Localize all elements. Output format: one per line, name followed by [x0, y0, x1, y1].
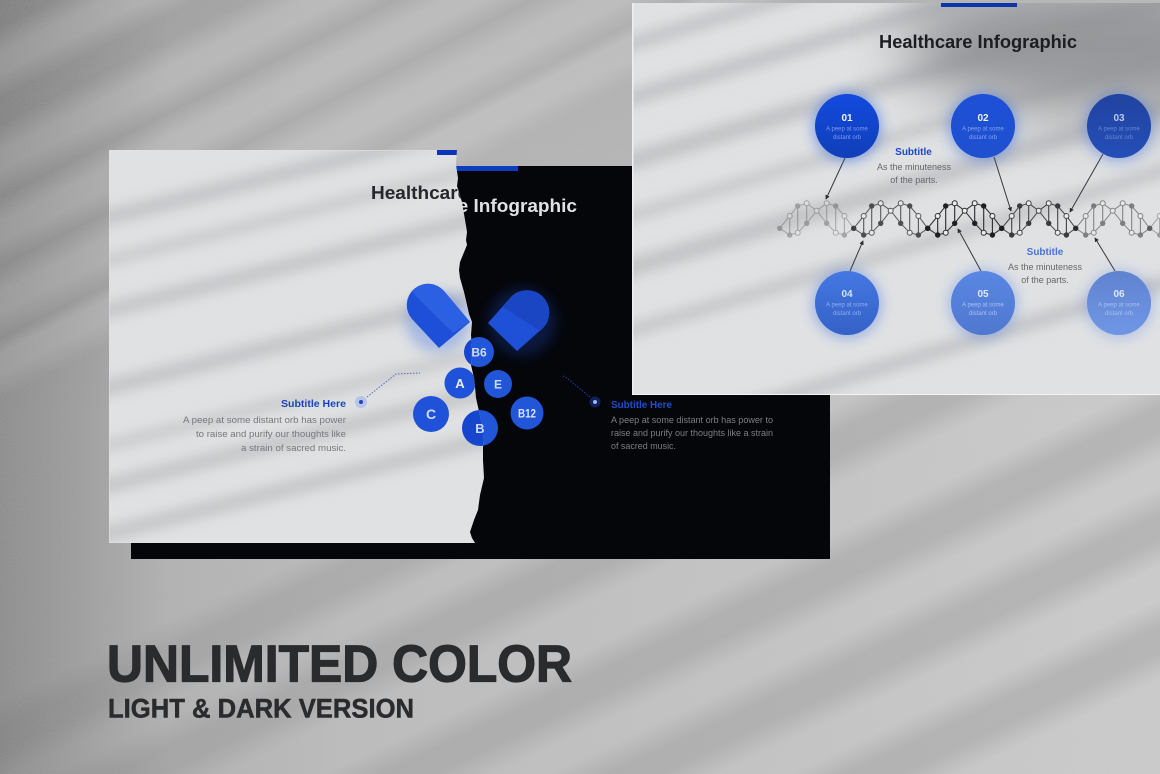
vitamin circle: B6 light part: [464, 339, 472, 365]
circle 06: 06: [1113, 289, 1125, 300]
text block: subtitle two: [1008, 247, 1083, 285]
vitamin circle: B6: B6: [471, 346, 487, 360]
text block: light subtitle: a strain of sacred music.: [241, 443, 346, 453]
text block: dark subtitle: of sacred music.: [611, 441, 676, 451]
dotted leader left: [367, 373, 420, 397]
vitamin circle: B: [462, 410, 498, 446]
dark slide title: Healthcare Infographic: [371, 196, 577, 216]
light slide title: Healthcare Infographic: [371, 183, 577, 203]
text block: subtitle two: of the parts.: [1021, 275, 1069, 285]
circle 02: distant orb: [969, 135, 998, 141]
vitamin circle: B6: [464, 337, 494, 367]
circle 03: A peep at some: [1098, 126, 1141, 132]
accent bar: [941, 3, 1017, 7]
circle 01: A peep at some: [826, 126, 869, 132]
circle 03: distant orb: [1105, 135, 1134, 141]
vitamin circle: B: B: [475, 421, 485, 436]
panel: dark slide: [131, 166, 830, 559]
headline: UNLIMITED COLOR: [107, 636, 572, 694]
text block: dark subtitle: Subtitle Here: [611, 400, 672, 411]
circle 04: A peep at some: [826, 302, 869, 308]
text block: subtitle two: As the minuteness: [1008, 262, 1083, 272]
text block: subtitle one: As the minuteness: [877, 162, 952, 172]
circle 05: A peep at some: [962, 302, 1005, 308]
text block: light subtitle: to raise and purify our thoughts like: [196, 429, 346, 439]
marker left: [355, 396, 367, 408]
vitamin circle: C: [413, 396, 449, 432]
subheadline: LIGHT & DARK VERSION: [108, 694, 414, 724]
vitamin circle: C: C: [426, 406, 436, 422]
circle 05: 05: [977, 289, 989, 300]
circle 04: [812, 269, 882, 339]
vitamin circle: A: [444, 368, 476, 398]
icon: left half of capsule: [407, 284, 470, 348]
text block: subtitle one: Subtitle: [895, 147, 932, 158]
circle 01: [812, 92, 882, 162]
circle 03: [1084, 92, 1154, 162]
text block: light subtitle: A peep at some distant orb has power: [183, 415, 346, 425]
circle 06: distant orb: [1105, 311, 1134, 317]
text block: subtitle one: [877, 147, 952, 185]
text block: light subtitle: Subtitle Here: [281, 399, 346, 410]
circle 05: [948, 269, 1018, 339]
text block: subtitle one: of the parts.: [890, 175, 938, 185]
vitamin circle: E: E: [494, 378, 502, 392]
marker right: [590, 396, 600, 408]
text block: subtitle two: Subtitle: [1027, 247, 1064, 258]
vitamin circle: E: [484, 370, 512, 398]
shadow top right: [900, 0, 1160, 115]
circle 02: A peep at some: [962, 126, 1005, 132]
circle 01: distant orb: [833, 135, 862, 141]
dark slide accent bar: [456, 166, 518, 171]
dotted leader right: [563, 376, 590, 397]
light slide accent bar: [437, 150, 457, 155]
connector arrows: [826, 154, 1115, 271]
vitamin circle: B12: B12: [518, 406, 536, 420]
circle 03: 03: [1113, 113, 1125, 124]
circle 05: distant orb: [969, 311, 998, 317]
text block: light subtitle: [183, 399, 346, 453]
circle 04: distant orb: [833, 311, 862, 317]
text block: dark subtitle: raise and purify our thoughts like a strain: [611, 428, 773, 438]
panel: light slide torn: [109, 150, 484, 543]
dark slide pill glow: [488, 288, 556, 356]
vitamin circle: B12: [510, 396, 544, 430]
vitamin circle: A: A: [455, 376, 465, 391]
circle 01: 01: [841, 113, 853, 124]
text block: dark subtitle: A peep at some distant orb has power to: [611, 415, 773, 425]
DNA helix: [777, 201, 1160, 238]
light slide pill glow: [406, 292, 470, 352]
vitamin circle: B light part: B: [475, 421, 485, 436]
text block: dark subtitle: [611, 400, 773, 451]
circle 04: 04: [841, 289, 853, 300]
circle 02: 02: [977, 113, 989, 124]
circle 02: [948, 92, 1018, 162]
panel: light slide with DNA: [632, 3, 1160, 395]
vitamin circle: B light part: [462, 410, 484, 446]
slide title: Healthcare Infographic: [879, 32, 1077, 52]
circle 06: [1084, 269, 1154, 339]
circle 06: A peep at some: [1098, 302, 1141, 308]
icon: right half of capsule: [488, 290, 549, 351]
